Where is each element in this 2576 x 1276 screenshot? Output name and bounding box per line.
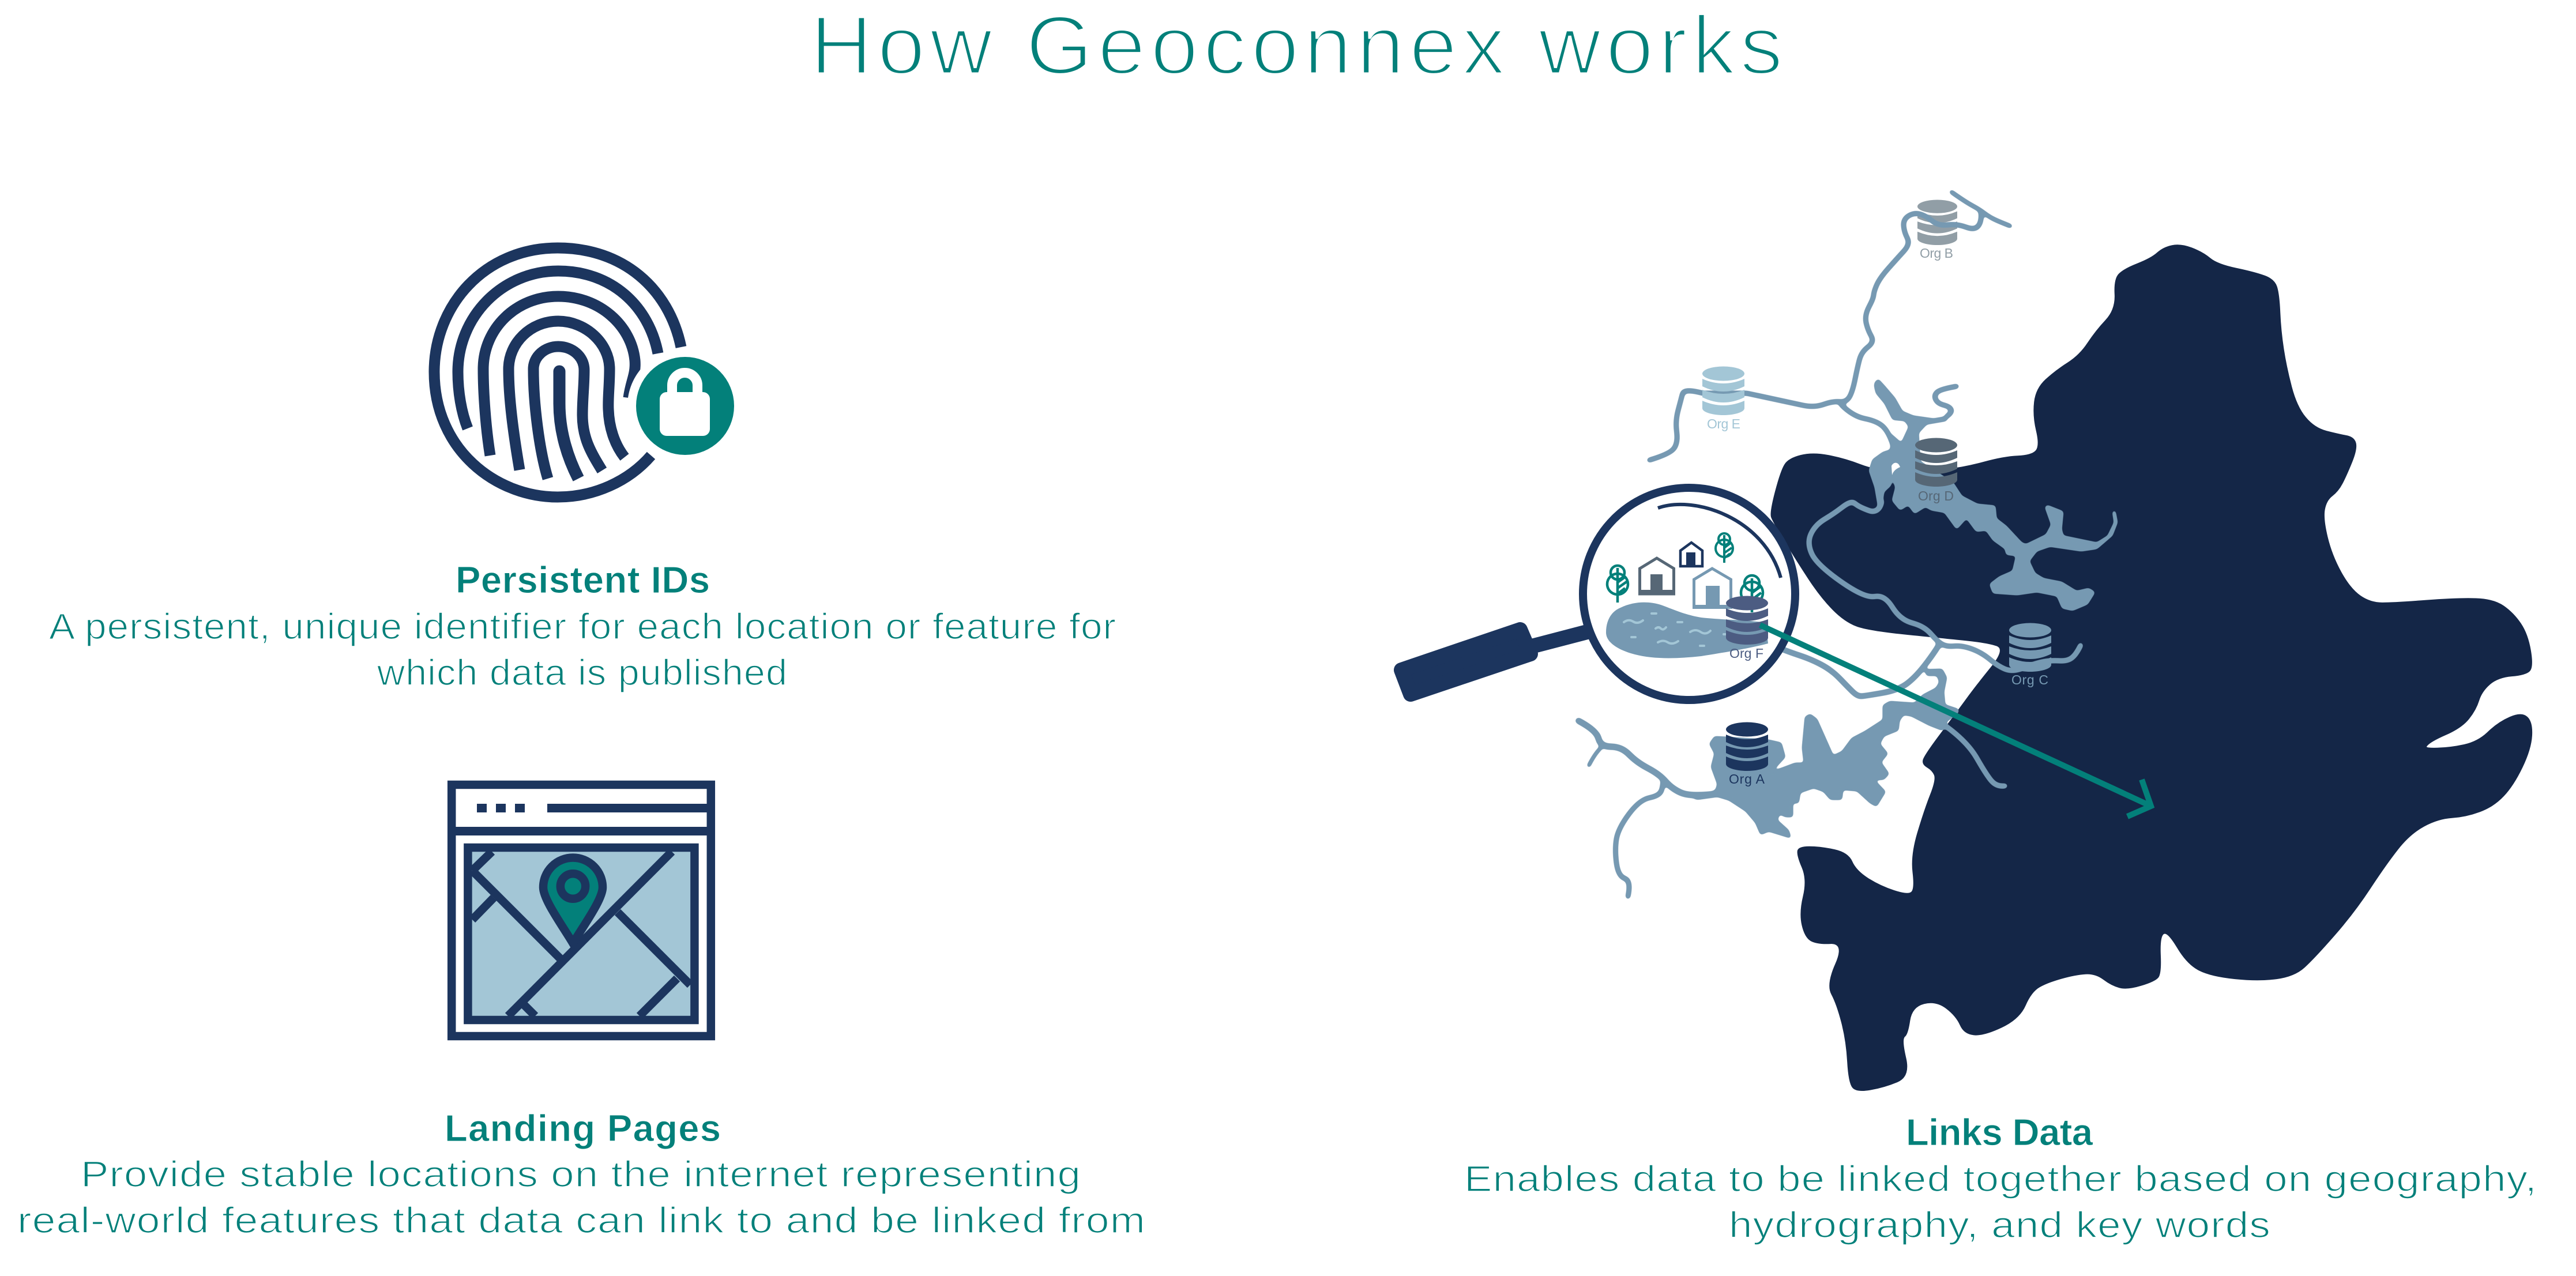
database: Org F: Org F: [1729, 646, 1763, 661]
heading: persistent IDs: Persistent IDs: [456, 559, 710, 601]
house dark: [1680, 543, 1702, 566]
panel: landing pages: [17, 785, 1146, 1241]
tree left: [1607, 566, 1628, 603]
heading: links data: Links Data: [1906, 1111, 2093, 1153]
house light: [1694, 569, 1731, 607]
text: links data description: hydrography, and key words: [1729, 1205, 2271, 1245]
tree top: [1716, 533, 1733, 563]
text: persistent IDs description: [49, 607, 1116, 693]
river: north main stem: [1841, 212, 1981, 402]
river: southwest upper fork: [1578, 721, 1716, 795]
lake island: [1891, 463, 1900, 475]
text: landing pages description: [17, 1154, 1146, 1241]
lake: lower reservoir: [1693, 669, 1959, 838]
text: links data description: Enables data to be linked together based on geography,: [1464, 1159, 2537, 1199]
text: persistent IDs description: A persistent, unique identifier for each location or feature for: [49, 607, 1116, 647]
river: S-curve above Org D: [1935, 386, 1957, 416]
database: Org F: [1726, 596, 1768, 661]
text: links data description: [1464, 1159, 2537, 1245]
river: southeast stream: [1946, 727, 2005, 786]
database: Org A: [1726, 722, 1768, 786]
lake: upper reservoir: [1869, 379, 2118, 611]
database: Org C: Org C: [2011, 672, 2048, 687]
text: persistent IDs description: which data is published: [377, 653, 788, 693]
magnifier handle: [1401, 630, 1587, 694]
map: watershed shape: [1771, 244, 2532, 1091]
text: landing pages description: Provide stable locations on the internet representing: [81, 1154, 1081, 1195]
title: How Geoconnex works: [810, 0, 1788, 92]
river: junction to upper lake: [1841, 405, 1893, 444]
icon: fingerprint with lock: [434, 248, 743, 497]
database: Org D: [1915, 438, 1957, 503]
icon: map pin: [543, 858, 603, 943]
database: Org A: Org A: [1729, 771, 1765, 786]
panel: links data: [1401, 192, 2537, 1245]
river: southwest lower fork: [1616, 778, 1663, 897]
lake in lens: [1606, 603, 1768, 658]
database: Org B (under river): [1917, 200, 1957, 261]
database: Org E: Org E: [1707, 416, 1740, 431]
magnifier lens: [1583, 488, 1795, 700]
water ripples: [1624, 613, 1728, 646]
database: Org E: [1702, 367, 1744, 431]
icon: browser window with map: [447, 785, 715, 1036]
database: Org D: Org D: [1918, 488, 1954, 503]
arrow: [1760, 625, 2151, 816]
river: west branch through Org E: [1649, 391, 1841, 460]
icon: magnifying glass: [1401, 488, 1795, 700]
river: outlet of Org F lake: [1768, 643, 1939, 697]
heading: landing pages: Landing Pages: [445, 1107, 721, 1149]
text: landing pages description: real-world features that data can link to and be linked from: [17, 1200, 1146, 1241]
river: north branch: [1951, 192, 2010, 226]
database: Org C: [2009, 623, 2051, 687]
river: across main shape to Org C: [1809, 502, 2081, 671]
database: Org B (under river): Org B: [1920, 246, 1953, 261]
panel: persistent IDs: [49, 248, 1116, 693]
tree right: [1741, 575, 1763, 612]
house gray: [1640, 558, 1674, 594]
rivers and lakes: [1578, 192, 2118, 897]
